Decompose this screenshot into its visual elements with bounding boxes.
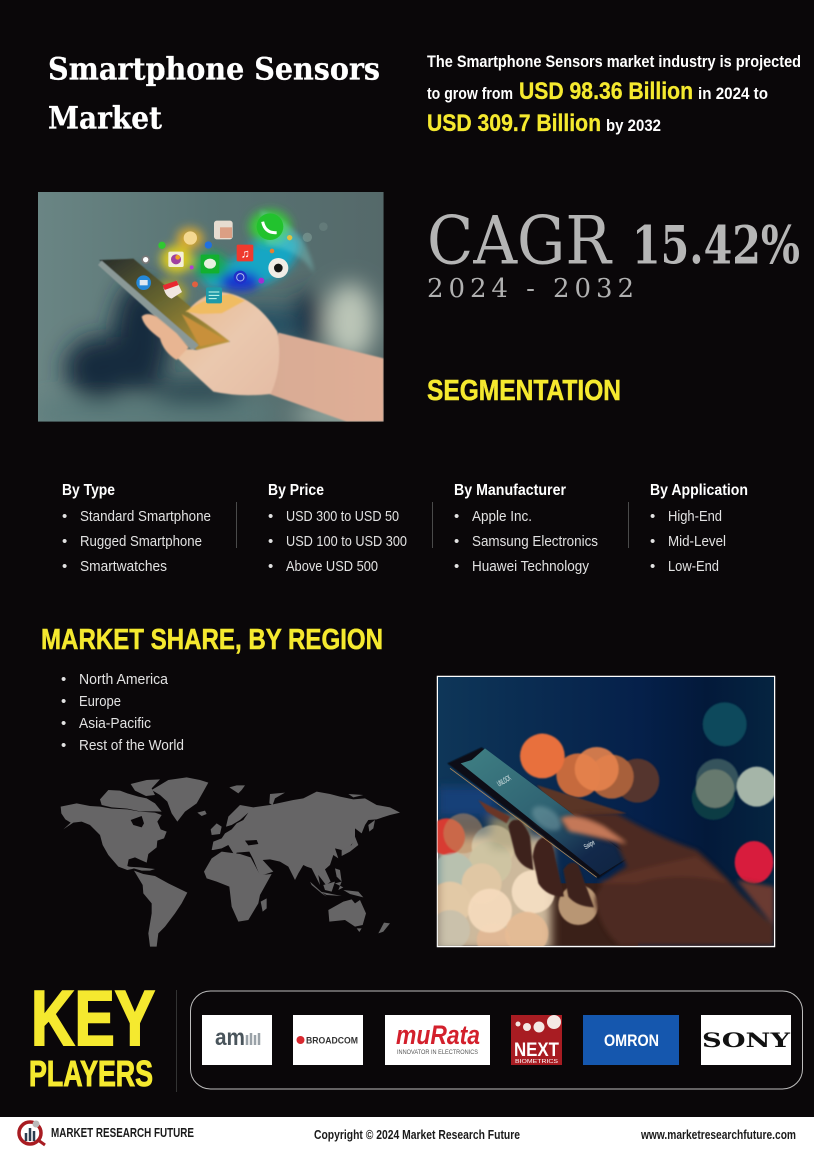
segment: By Application: • — [650, 533, 655, 550]
market projection text: USD 98.36 Billion — [519, 78, 693, 105]
segment: By Type: Smartwatches — [80, 558, 167, 575]
title: Smartphone Sensors — [48, 52, 380, 88]
segment: By Manufacturer: • — [454, 508, 459, 525]
logo: Broadcom: BROADCOM — [306, 1036, 358, 1046]
app glow — [153, 210, 300, 307]
key players heading: KEY — [31, 974, 155, 1062]
region list — [61, 671, 184, 754]
segment: By Price: Above USD 500 — [286, 558, 378, 575]
logo: ams: am — [215, 1024, 245, 1050]
CAGR figure — [427, 202, 800, 304]
segment: By Manufacturer — [454, 482, 598, 575]
hand behind phone and holding fingers — [478, 785, 627, 907]
market projection text: by 2032 — [606, 117, 661, 135]
footer bar — [0, 1117, 814, 1150]
key players heading — [29, 974, 155, 1094]
app icons — [136, 213, 328, 303]
segment: By Price — [268, 482, 407, 575]
segment: By Application: • — [650, 508, 655, 525]
market share heading: MARKET SHARE, BY REGION — [41, 624, 383, 656]
logo: Murata: INNOVATOR IN ELECTRONICS — [397, 1050, 478, 1056]
segment: By Application: By Application — [650, 482, 748, 499]
phone — [447, 747, 630, 878]
segment: By Price: • — [268, 533, 273, 550]
segment: By Manufacturer: • — [454, 533, 459, 550]
logo: Sony — [701, 1015, 791, 1065]
segment: By Price: USD 100 to USD 300 — [286, 533, 407, 550]
region list: Europe — [79, 693, 121, 710]
hand and arm — [142, 292, 384, 422]
phone — [98, 259, 230, 351]
market projection text — [427, 53, 801, 137]
photo: hand using smartphone with bokeh lights: Swipe — [582, 838, 596, 851]
segment: By Price: • — [268, 508, 273, 525]
logo: Murata: muRata — [396, 1020, 480, 1050]
market projection text: to grow from — [427, 85, 513, 103]
photo: hand holding smartphone with app icons — [38, 192, 387, 427]
segment: By Application: High-End — [668, 508, 722, 525]
region list: • — [61, 737, 66, 754]
market projection text: USD 309.7 Billion — [427, 110, 601, 137]
key players heading: PLAYERS — [29, 1053, 153, 1094]
segment: By Application — [650, 482, 748, 575]
region list: • — [61, 671, 66, 688]
logo: ams — [202, 1015, 272, 1065]
segment: By Manufacturer: Huawei Technology — [472, 558, 589, 575]
logo: Omron: OMRON — [604, 1031, 659, 1050]
photo: hand using smartphone with bokeh lights: UNLOCK — [495, 773, 513, 788]
logo: Sony: SONY — [702, 1028, 791, 1052]
region list: • — [61, 693, 66, 710]
segment: By Application: Mid-Level — [668, 533, 726, 550]
title — [48, 52, 380, 136]
footer bar: MARKET RESEARCH FUTURE — [51, 1126, 194, 1140]
key players panel — [190, 991, 802, 1089]
segment: By Manufacturer: Samsung Electronics — [472, 533, 598, 550]
logo: NEXT Biometrics — [511, 1015, 562, 1065]
segment: By Manufacturer: Apple Inc. — [472, 508, 532, 525]
segment: By Price: By Price — [268, 482, 324, 499]
logo: Broadcom — [293, 1015, 363, 1065]
logo: NEXT Biometrics: BIOMETRICS — [515, 1059, 559, 1065]
app icons: ♫ — [241, 246, 250, 260]
world map — [61, 777, 400, 947]
segment: By Type: Standard Smartphone — [80, 508, 211, 525]
logo: Omron — [583, 1015, 679, 1065]
segment: By Price: • — [268, 558, 273, 575]
market projection text: in 2024 to — [698, 85, 768, 103]
region list: Asia-Pacific — [79, 715, 151, 732]
logo: NEXT Biometrics: NEXT — [514, 1040, 559, 1061]
logo: Murata — [385, 1015, 490, 1065]
segment: By Type: Rugged Smartphone — [80, 533, 202, 550]
photo: hand using smartphone with bokeh lights — [428, 676, 777, 957]
region list: Rest of the World — [79, 737, 184, 754]
segment: By Type: By Type — [62, 482, 115, 499]
CAGR figure: CAGR — [427, 202, 613, 280]
region list: • — [61, 715, 66, 732]
title: Market — [48, 100, 163, 136]
segment: By Application: • — [650, 558, 655, 575]
segmentation heading: SEGMENTATION — [427, 375, 621, 407]
segment: By Type — [62, 482, 211, 575]
segment: By Type: • — [62, 558, 67, 575]
footer bar: Copyright © 2024 Market Research Future — [314, 1128, 520, 1142]
CAGR figure: 2024 - 2032 — [427, 274, 634, 304]
segment: By Application: Low-End — [668, 558, 719, 575]
hand — [561, 813, 774, 946]
segment: By Type: • — [62, 533, 67, 550]
segment: By Type: • — [62, 508, 67, 525]
segment: By Manufacturer: • — [454, 558, 459, 575]
segment: By Manufacturer: By Manufacturer — [454, 482, 566, 499]
icon: Market Research Future logo — [19, 1120, 45, 1145]
segment: By Price: USD 300 to USD 50 — [286, 508, 399, 525]
region list: North America — [79, 671, 169, 688]
